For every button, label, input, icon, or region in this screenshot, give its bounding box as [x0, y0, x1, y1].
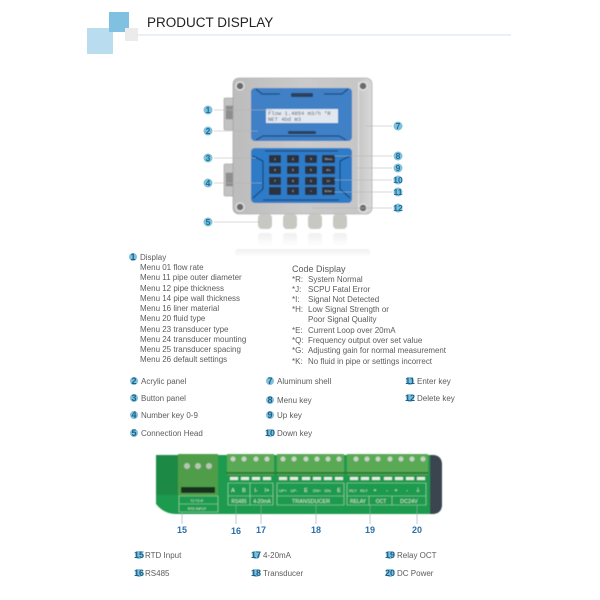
- board legend: 15: [134, 550, 144, 560]
- board legend: 16: [134, 568, 144, 578]
- silkscreen labels: E: [304, 488, 308, 494]
- code display list: *E:: [292, 326, 303, 335]
- silkscreen labels: RS485: [231, 499, 247, 505]
- code display list: No fluid in pipe or settings incorrect: [308, 357, 433, 366]
- keys: [269, 155, 335, 195]
- parts legend 7-10: [265, 376, 331, 438]
- header squares icon: [87, 12, 138, 54]
- title: PRODUCT DISPLAY: [147, 15, 273, 30]
- parts legend 11-12: 12: [405, 393, 415, 403]
- callout badges left: [204, 105, 212, 227]
- parts legend 7-10: Up key: [277, 411, 302, 420]
- key labels: 1: [274, 157, 276, 161]
- callout badges right: 11: [394, 187, 403, 197]
- key labels: Enter: [325, 189, 332, 193]
- board legend: DC Power: [397, 569, 434, 578]
- board callout numbers: 20: [412, 525, 422, 535]
- key labels: 6: [310, 168, 312, 172]
- parts legend 7-10: Aluminum shell: [277, 377, 331, 386]
- board legend: RTD Input: [145, 551, 182, 560]
- parts legend 11-12: 11: [405, 376, 415, 386]
- callout badges right: [393, 121, 403, 213]
- code display list: *J:: [292, 285, 301, 294]
- key labels: 3: [310, 157, 312, 161]
- board legend: 18: [251, 568, 261, 578]
- board legend: 20: [385, 568, 395, 578]
- parts legend 7-10: 8: [267, 395, 273, 405]
- silkscreen labels: RTD INPUT: [188, 507, 207, 511]
- display menu list: Display: [140, 253, 166, 262]
- LCD: Flow 1.4854 m3/h *R: [268, 110, 331, 117]
- silkscreen labels: 4-20mA: [253, 499, 271, 505]
- silkscreen labels: +: [373, 488, 377, 494]
- board legend: [134, 550, 437, 578]
- display menu list: Menu 25 transducer spacing: [140, 345, 241, 354]
- key labels: 7: [274, 179, 276, 183]
- code display list: Poor Signal Quality: [308, 315, 376, 324]
- parts legend 2-5: Number key 0-9: [141, 411, 198, 420]
- key labels: 5: [292, 168, 294, 172]
- display menu list: Menu 23 transducer type: [140, 325, 229, 334]
- display menu list: Menu 12 pipe thickness: [140, 284, 224, 293]
- display menu list: Menu 01 flow rate: [140, 263, 204, 272]
- silkscreen labels: B: [242, 488, 246, 494]
- display menu list: Menu 26 default settings: [140, 355, 227, 364]
- callout badges left: 3: [206, 153, 211, 163]
- callout badges right: 9: [396, 163, 401, 173]
- corner screws: [236, 82, 367, 212]
- callout badges left: 1: [206, 105, 211, 115]
- parts legend 7-10: 10: [265, 428, 275, 438]
- silkscreen labels: I+: [265, 488, 269, 494]
- code display list: SCPU Fatal Error: [308, 285, 371, 294]
- display menu list: Menu 24 transducer mounting: [140, 335, 246, 344]
- silkscreen labels: -: [406, 488, 408, 494]
- callout badges left: 4: [206, 178, 211, 188]
- silkscreen labels: +: [394, 488, 398, 494]
- display menu list: Menu 11 pipe outer diameter: [140, 273, 242, 282]
- silkscreen labels: -: [386, 488, 388, 494]
- board legend: 17: [251, 550, 261, 560]
- code display list: Adjusting gain for normal measurement: [308, 346, 447, 355]
- parts legend 2-5: 3: [131, 393, 137, 403]
- silkscreen labels: UP+: [279, 488, 288, 493]
- key labels: A/+: [326, 168, 331, 172]
- display menu list: Menu 14 pipe wall thickness: [140, 294, 240, 303]
- terminal blocks: [226, 454, 428, 480]
- board callout numbers: 18: [311, 525, 321, 535]
- board legend: RS485: [145, 569, 170, 578]
- code display list: Code Display: [292, 264, 346, 274]
- key labels: [274, 157, 333, 193]
- display menu list: Menu 20 fluid type: [140, 314, 206, 323]
- parts legend 2-5: Button panel: [141, 394, 186, 403]
- board legend: 19: [385, 550, 395, 560]
- board: [156, 455, 442, 514]
- parts legend 7-10: Menu key: [277, 396, 312, 405]
- silkscreen label boxes: [179, 483, 426, 512]
- LCD: NET 4bd m3: [268, 116, 301, 123]
- silkscreen labels: RELAY: [350, 499, 367, 505]
- parts legend 11-12: Delete key: [417, 394, 455, 403]
- board legend: Transducer: [263, 569, 304, 578]
- callout badges left: 5: [206, 217, 211, 227]
- parts legend 2-5: Acrylic panel: [141, 377, 187, 386]
- key labels: 8: [292, 179, 294, 183]
- code display list: [292, 264, 447, 366]
- parts legend 7-10: Down key: [277, 429, 312, 438]
- display menu list: [129, 252, 246, 364]
- code display list: *I:: [292, 295, 300, 304]
- board callout numbers: 15: [177, 525, 187, 535]
- code display list: Low Signal Strength or: [308, 305, 389, 314]
- callout badges right: 7: [396, 121, 401, 131]
- board legend: Relay OCT: [397, 551, 437, 560]
- silkscreen labels: ⏚: [415, 487, 421, 494]
- parts legend 11-12: [405, 376, 455, 403]
- key labels: 0: [292, 189, 294, 193]
- key labels: 9: [310, 179, 312, 183]
- reflection: [235, 233, 370, 257]
- code display list: *H:: [292, 305, 303, 314]
- key labels: Menu: [325, 157, 333, 161]
- callout badges right: 12: [393, 203, 403, 213]
- code display list: *K:: [292, 357, 303, 366]
- silkscreen labels: [188, 487, 421, 511]
- code display list: *R:: [292, 275, 303, 284]
- silkscreen labels: DN+: [313, 488, 322, 493]
- code display list: *G:: [292, 346, 304, 355]
- aluminum case: [233, 78, 372, 214]
- callout badges right: 10: [393, 175, 403, 185]
- silkscreen labels: DC24V: [400, 499, 418, 505]
- parts legend 2-5: Connection Head: [141, 429, 203, 438]
- board callout numbers: 19: [365, 525, 375, 535]
- cable glands: [258, 214, 347, 229]
- callout lines: [214, 110, 392, 222]
- silkscreen labels: UP-: [291, 488, 298, 493]
- key labels: .: [275, 189, 276, 193]
- keypad panel: [251, 148, 352, 203]
- code display list: *Q:: [292, 336, 304, 345]
- header: product display: [87, 12, 511, 54]
- RTD connector: [178, 454, 218, 496]
- key labels: <: [310, 189, 312, 193]
- key labels: 2: [292, 157, 294, 161]
- silkscreen labels: RLY: [360, 488, 368, 493]
- board callout numbers: 16: [231, 526, 241, 536]
- silkscreen labels: T2 T3 IF: [190, 499, 204, 503]
- parts legend 2-5: 4: [131, 410, 137, 420]
- parts legend 2-5: 5: [131, 428, 137, 438]
- mounting brackets: [224, 98, 234, 196]
- display menu list: Menu 16 liner material: [140, 304, 219, 313]
- display panel: [251, 88, 352, 141]
- key labels: V/-: [327, 179, 330, 183]
- code display list: Frequency output over set value: [308, 336, 423, 345]
- parts legend 7-10: 7: [267, 376, 273, 386]
- silkscreen labels: RLY: [349, 488, 357, 493]
- key labels: 4: [274, 168, 276, 172]
- parts legend 11-12: Enter key: [417, 377, 451, 386]
- parts legend 2-5: [130, 376, 203, 438]
- product photo: flow meter: [224, 78, 372, 257]
- parts legend 2-5: 2: [131, 376, 137, 386]
- code display list: Current Loop over 20mA: [308, 326, 396, 335]
- silkscreen labels: A: [231, 488, 235, 494]
- silkscreen labels: I-: [254, 488, 258, 494]
- silkscreen labels: TRANSDUCER: [292, 499, 330, 505]
- silkscreen labels: E: [337, 488, 341, 494]
- code display list: Signal Not Detected: [308, 295, 379, 304]
- board callout numbers: 17: [256, 525, 266, 535]
- board callout numbers: [177, 525, 422, 536]
- header rule: [138, 34, 511, 36]
- silkscreen labels: DN-: [324, 488, 332, 493]
- silkscreen labels: OCT: [376, 499, 386, 505]
- display menu list: 1: [130, 252, 136, 262]
- terminal board photo: [156, 454, 442, 514]
- board callout leader lines: [182, 505, 417, 524]
- parts legend 7-10: 9: [267, 410, 273, 420]
- board legend: 4-20mA: [263, 551, 292, 560]
- code display list: System Normal: [308, 275, 363, 284]
- callout badges right: 8: [396, 151, 401, 161]
- callout badges left: 2: [206, 126, 211, 136]
- LCD: [266, 109, 338, 123]
